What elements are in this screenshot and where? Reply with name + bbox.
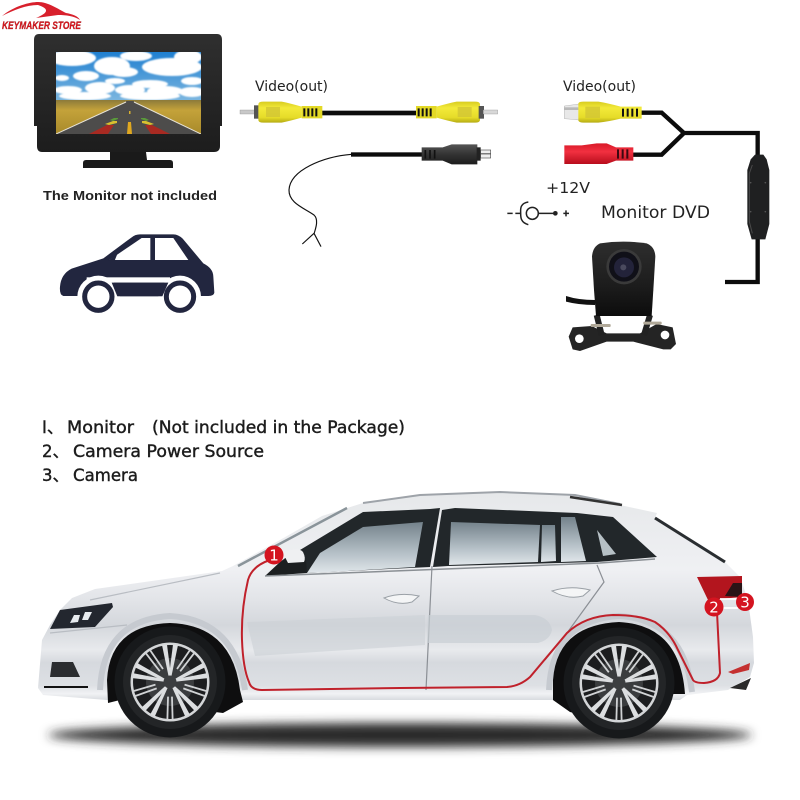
icon: DC power symbol	[507, 202, 569, 225]
label: video out right: Video(out)	[563, 79, 636, 95]
camera bracket	[569, 324, 676, 351]
headlight	[50, 603, 113, 629]
wing mirror	[265, 556, 307, 576]
legend item 1	[42, 418, 405, 437]
legend item 3: 3、	[42, 466, 69, 485]
store logo	[2, 2, 82, 32]
camera photo	[566, 242, 676, 351]
legend item 2: 2、	[42, 442, 69, 461]
label: monitor DVD: Monitor DVD	[601, 203, 710, 223]
connector lines 2 to 3	[720, 599, 738, 608]
icon: car	[60, 234, 214, 318]
camera lens	[606, 249, 642, 284]
front wheel arch	[107, 623, 243, 713]
marker 3	[736, 593, 754, 612]
camera wiring harness	[564, 102, 769, 282]
ground shadow	[48, 723, 752, 747]
front fog lamp	[50, 662, 80, 677]
red wiring route	[242, 560, 720, 690]
yellow RCA cable	[240, 102, 498, 123]
taillight	[697, 576, 742, 600]
marker 2	[704, 598, 724, 616]
rear reflector	[728, 663, 750, 674]
white car	[38, 492, 754, 738]
rear wheel arch	[553, 622, 685, 720]
front wheel arch trim	[100, 616, 245, 690]
door handles	[384, 594, 419, 603]
yellow RCA socket	[564, 102, 642, 123]
label: +12V: +12V	[546, 179, 590, 197]
marker 3: 3	[740, 594, 750, 612]
hood crease	[50, 573, 220, 633]
legend item 3	[42, 466, 138, 485]
windscreen edge	[238, 508, 347, 566]
store logo: KEYMAKER STORE	[2, 20, 82, 32]
rear door window	[433, 508, 657, 567]
rear wheel	[564, 628, 674, 738]
black power cable with bare wires	[289, 144, 491, 247]
legend item 1: (Not included in the Package)	[152, 418, 405, 437]
door body panel	[427, 615, 552, 643]
rear wheel arch trim	[549, 616, 692, 692]
legend item 1: I、	[42, 418, 63, 437]
label: video out left: Video(out)	[255, 79, 328, 95]
numbered legend list	[42, 418, 405, 485]
roof rail	[363, 492, 620, 504]
red RCA socket	[564, 143, 633, 164]
inline module	[747, 155, 769, 239]
camera housing	[592, 242, 655, 316]
rear tailgate glass	[655, 518, 725, 562]
monitor	[34, 34, 222, 168]
caption: monitor not included: The Monitor not included	[43, 188, 217, 203]
legend item 2: Camera Power Source	[73, 442, 264, 461]
marker 1: 1	[269, 546, 279, 564]
door lines	[426, 565, 604, 690]
marker 1	[264, 546, 284, 564]
monitor stand	[83, 152, 173, 168]
monitor screen	[48, 50, 205, 134]
legend item 3: Camera	[73, 466, 138, 485]
marker 2: 2	[709, 598, 719, 616]
front door window	[300, 508, 440, 573]
legend item 1: Monitor	[67, 418, 134, 437]
front wheel	[114, 626, 226, 738]
car body	[38, 492, 754, 700]
